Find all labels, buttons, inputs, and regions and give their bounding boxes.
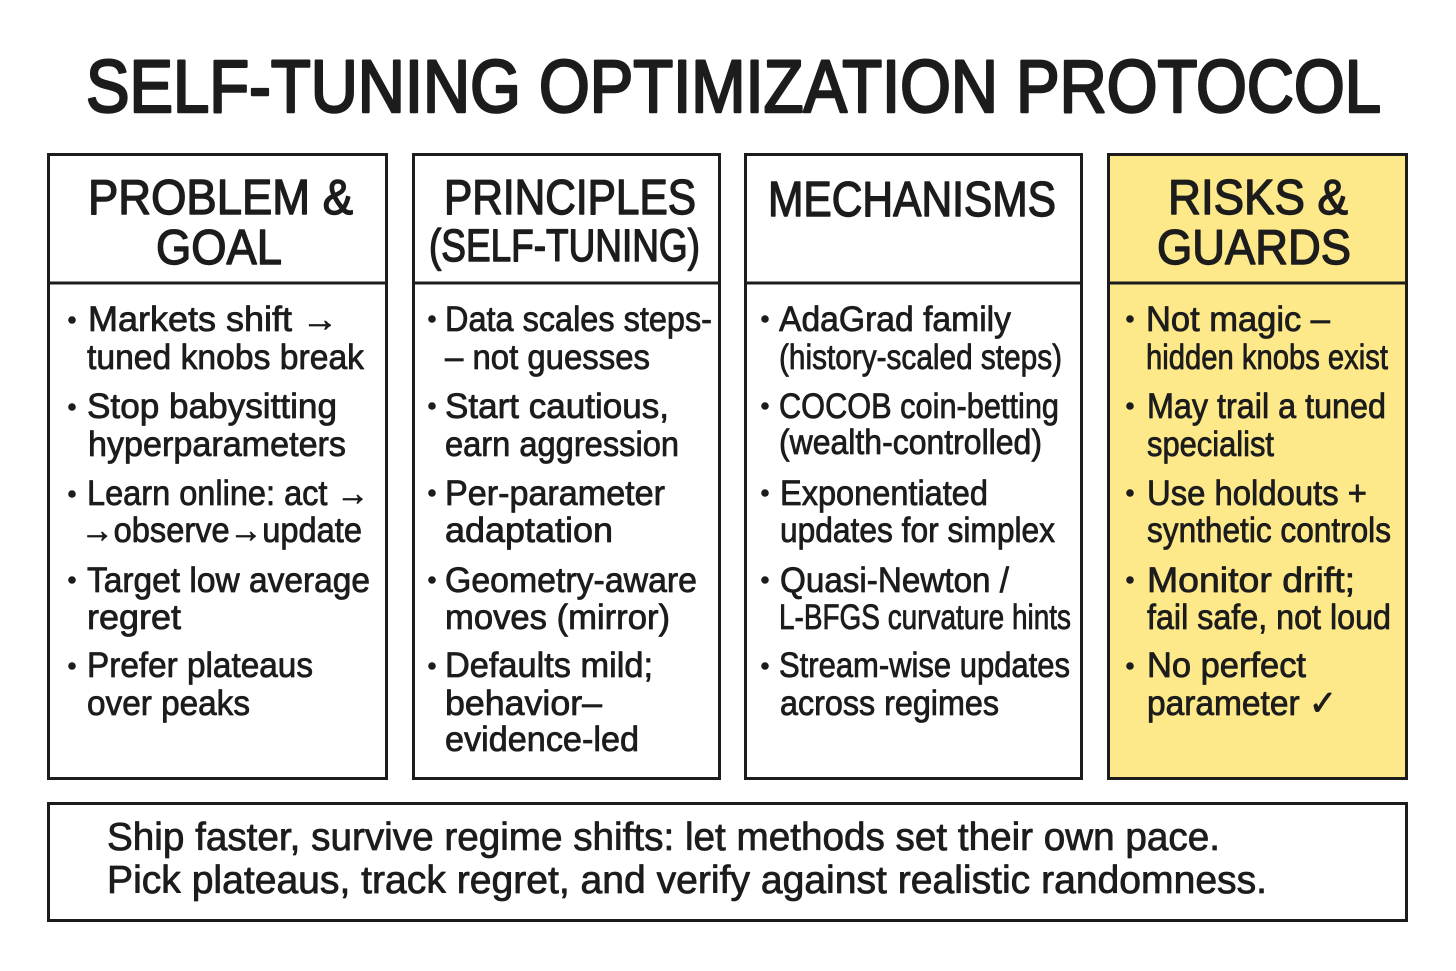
list: problem and goal: →observe→update [81, 511, 362, 550]
list: risks and guards: Use holdouts + [1147, 474, 1367, 513]
list: mechanisms: COCOB coin-betting [779, 387, 1059, 426]
list: problem and goal: Learn online: act → [87, 474, 369, 513]
list: problem and goal: hyperparameters [88, 425, 346, 464]
heading: problem and goal: GOAL [156, 221, 282, 275]
list: risks and guards: hidden knobs exist [1146, 338, 1388, 377]
heading: risks and guards: RISKS & [1168, 171, 1348, 225]
list: mechanisms: L-BFGS curvature hints [779, 598, 1071, 637]
list: principles: evidence-led [445, 720, 639, 759]
list: risks and guards: May trail a tuned [1147, 387, 1386, 426]
callout: takeaway: Pick plateaus, track regret, and verify against realistic randomness. [107, 859, 1267, 902]
heading: risks and guards [1157, 171, 1351, 275]
heading: problem and goal: PROBLEM & [88, 171, 353, 225]
panel: problem and goal [48, 154, 387, 778]
list: problem and goal [68, 300, 370, 723]
panel: mechanisms [745, 154, 1082, 778]
list: mechanisms: (history-scaled steps) [779, 338, 1062, 377]
list: mechanisms: Stream-wise updates [779, 646, 1070, 685]
list: problem and goal: Markets shift → [88, 300, 338, 339]
list: principles [428, 300, 712, 759]
list: principles: adaptation [445, 511, 613, 550]
list: principles: Geometry-aware [445, 561, 697, 600]
panel: principles [413, 154, 720, 778]
list: risks and guards: synthetic controls [1147, 511, 1391, 550]
heading: principles: (SELF-TUNING) [429, 220, 700, 271]
list: problem and goal: tuned knobs break [87, 338, 364, 377]
list: principles: – not guesses [445, 338, 650, 377]
list: mechanisms: Exponentiated [780, 474, 988, 513]
list: problem and goal: Target low average [87, 561, 370, 600]
list: problem and goal: regret [87, 598, 181, 637]
list: mechanisms: (wealth-controlled) [779, 423, 1042, 462]
list: risks and guards: Monitor drift; [1147, 561, 1355, 600]
list: problem and goal: Prefer plateaus [87, 646, 313, 685]
list: principles: moves (mirror) [445, 598, 670, 637]
list: risks and guards: parameter ✓ [1147, 684, 1337, 723]
callout: takeaway: Ship faster, survive regime shifts: let methods set their own pace. [107, 816, 1220, 859]
list: mechanisms: across regimes [780, 684, 999, 723]
list: mechanisms: AdaGrad family [779, 300, 1011, 339]
list: principles: Start cautious, [445, 387, 669, 426]
list: mechanisms: Quasi-Newton / [780, 561, 1009, 600]
list: principles: behavior– [445, 684, 603, 723]
list: risks and guards: specialist [1147, 425, 1274, 464]
callout: takeaway [48, 804, 1406, 920]
list: mechanisms: updates for simplex [780, 511, 1055, 550]
list: problem and goal: over peaks [87, 684, 250, 723]
heading: risks and guards: GUARDS [1157, 221, 1351, 275]
heading: principles [429, 171, 700, 271]
list: principles: Per-parameter [445, 474, 665, 513]
panel: risks and guards [1108, 154, 1407, 778]
list: principles: Data scales steps- [445, 300, 712, 339]
heading: principles: PRINCIPLES [444, 171, 696, 225]
list: principles: Defaults mild; [445, 646, 653, 685]
heading: problem and goal [88, 171, 353, 275]
list: risks and guards: fail safe, not loud [1147, 598, 1391, 637]
list: risks and guards: Not magic – [1146, 300, 1331, 339]
list: mechanisms [761, 300, 1071, 723]
list: problem and goal: Stop babysitting [87, 387, 337, 426]
list: risks and guards [1126, 300, 1391, 723]
list: principles: earn aggression [445, 425, 679, 464]
list: risks and guards: No perfect [1147, 646, 1306, 685]
heading: mechanisms: MECHANISMS [768, 173, 1056, 227]
